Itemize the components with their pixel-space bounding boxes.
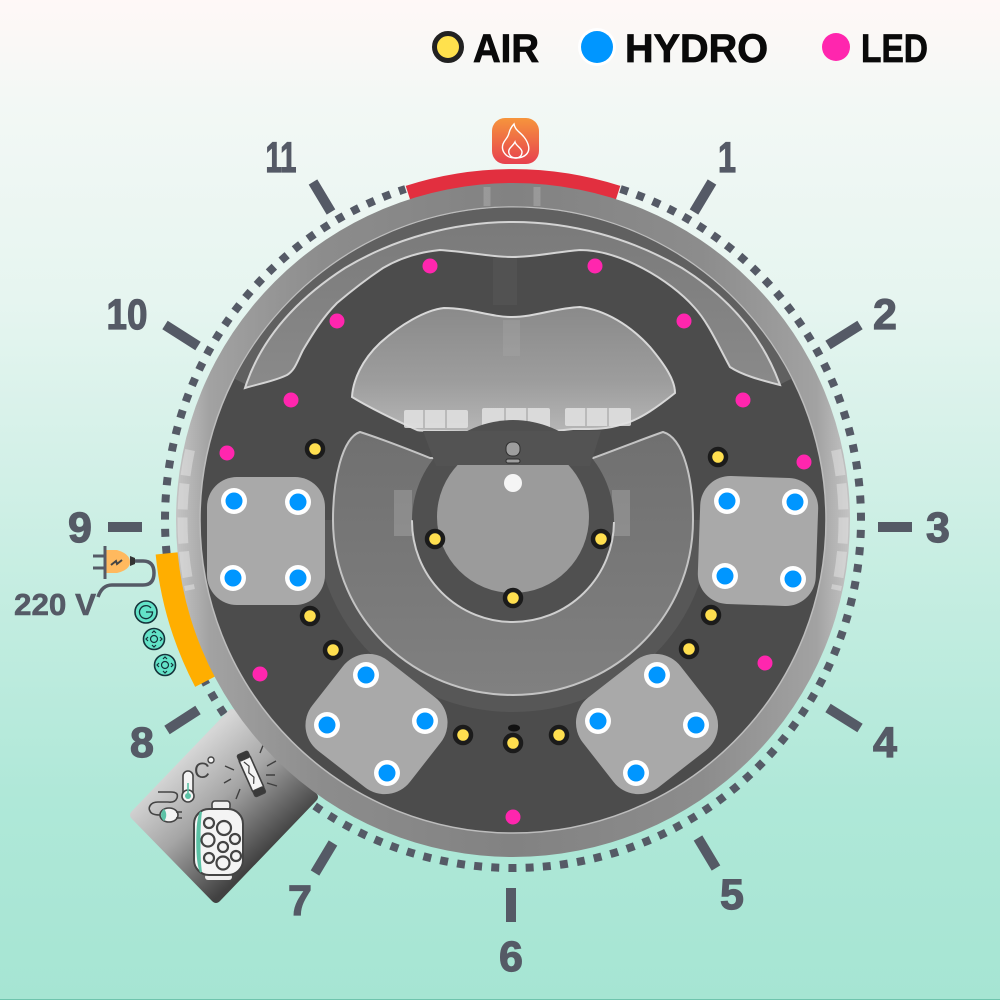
clock numbers: 7	[288, 877, 312, 925]
legend item: led: LED	[861, 27, 928, 71]
textured floor	[437, 465, 589, 592]
neck	[423, 431, 601, 466]
seat ring reflections	[394, 490, 630, 536]
clock numbers: 1	[718, 134, 736, 182]
lower seat ring halo	[333, 520, 693, 695]
voltage label: 220 V	[14, 587, 96, 622]
hot tub	[176, 183, 850, 857]
lower left hydro pad	[293, 641, 460, 807]
clock numbers: 10	[106, 291, 148, 339]
clock ticks	[108, 182, 912, 922]
white drain	[504, 474, 522, 492]
pipe shadow	[493, 258, 517, 305]
icon: mains plug	[93, 546, 154, 597]
icon: power button	[135, 601, 157, 623]
clock numbers: 3	[926, 504, 950, 552]
clock numbers: 11	[266, 134, 296, 182]
footwell	[412, 420, 614, 622]
clock numbers	[68, 134, 950, 981]
right hydro pad	[697, 475, 819, 607]
rim reflections	[182, 187, 844, 590]
lobe pipe reflection	[503, 320, 520, 356]
control side yellow arc	[168, 553, 206, 681]
icon: flame heater badge	[492, 118, 539, 164]
seat lobe	[352, 307, 675, 432]
clock numbers: 6	[499, 933, 523, 981]
icon: jet control one	[144, 628, 164, 650]
control buttons	[135, 601, 176, 676]
tub rim	[176, 183, 850, 857]
clock numbers: 9	[68, 504, 92, 552]
heater red arc	[408, 177, 618, 193]
clock numbers: 2	[873, 291, 897, 339]
legend item: air: AIR	[473, 27, 539, 71]
footwell jet fitting	[508, 724, 520, 732]
icon: thermometer with celsius: C	[194, 758, 210, 783]
lower right hydro pad	[563, 641, 731, 807]
legend item: led	[822, 27, 928, 71]
lobe water reflections	[404, 408, 631, 430]
icon: UV lamp	[224, 743, 277, 799]
icon: filter tank	[194, 801, 243, 880]
clock numbers: 8	[130, 719, 154, 767]
tub interior	[200, 207, 826, 833]
icon: thermometer with celsius	[182, 757, 214, 802]
upper band	[241, 215, 785, 382]
icon: power cord	[149, 792, 182, 822]
left hydro pad	[207, 477, 325, 605]
clock numbers: 4	[873, 719, 897, 767]
icon: jet control two	[154, 654, 176, 676]
legend item: air	[434, 27, 539, 71]
top lip crescent	[245, 222, 780, 388]
clock numbers: 5	[720, 871, 744, 919]
legend	[434, 27, 928, 71]
equipment panel	[130, 709, 318, 903]
drain fitting	[506, 442, 520, 463]
lower seat ring	[333, 432, 693, 695]
legend item: hydro: HYDRO	[625, 27, 768, 71]
air jets	[302, 441, 726, 751]
LED lights	[220, 258, 812, 824]
dotted clock ring	[165, 189, 861, 868]
